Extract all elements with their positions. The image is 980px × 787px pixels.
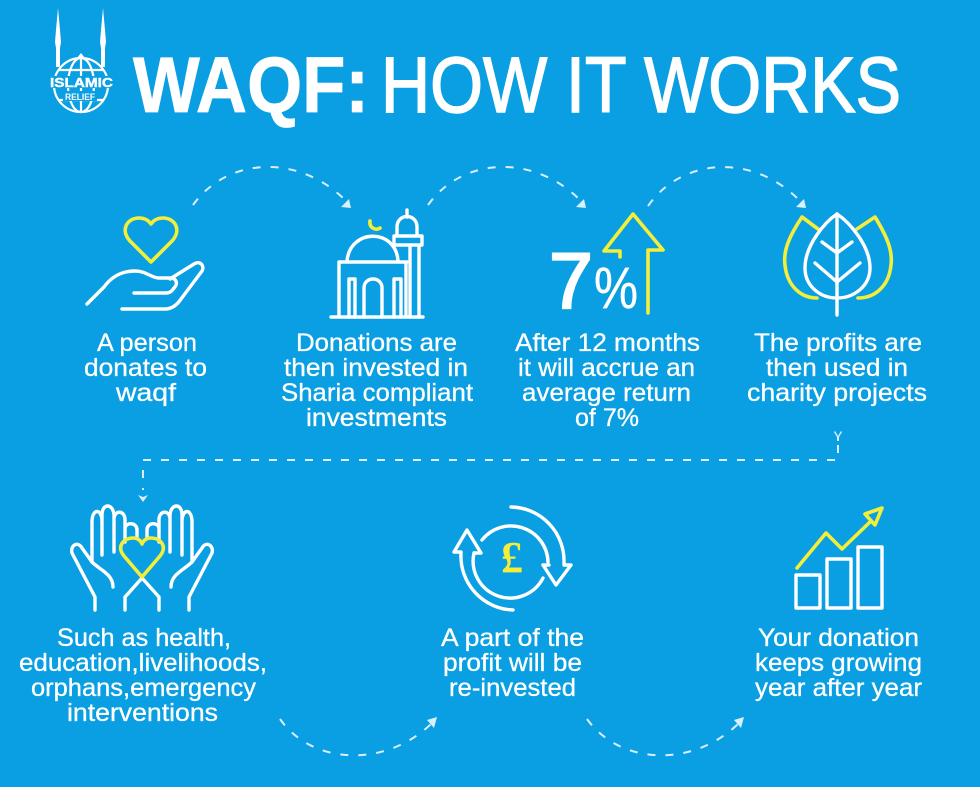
arrow: step 2 to step 3 xyxy=(428,167,586,208)
text: step 1: donates to xyxy=(84,354,207,382)
text: step 3 xyxy=(515,329,700,432)
text: step 1: waqf xyxy=(115,379,176,407)
text: step 4: then used in xyxy=(766,354,908,382)
title: HOW IT WORKS xyxy=(381,40,901,129)
text: keeps growing: Your donation xyxy=(758,624,919,652)
icon: pound with circular arrows xyxy=(454,507,571,610)
icon: hand holding heart xyxy=(87,218,203,309)
text: health and education: interventions xyxy=(67,699,218,727)
text: step 1 xyxy=(84,329,207,407)
text: re-invested: A part of the xyxy=(441,624,584,652)
arrow: step 3 to step 4 xyxy=(648,167,806,208)
text: step 3: After 12 months xyxy=(515,329,700,357)
icon: leaves xyxy=(785,214,891,315)
icon: seven percent with up arrow: 7 xyxy=(549,236,593,325)
arrow: step 1 to step 2 xyxy=(193,167,351,208)
icon: growth bar chart xyxy=(796,508,882,608)
text: re-invested: re-invested xyxy=(449,674,576,702)
text: health and education: education,livelihoods, xyxy=(19,649,267,677)
text: step 4 xyxy=(747,329,927,407)
title xyxy=(133,40,901,129)
arrow: bottom curve to growth xyxy=(587,717,744,755)
text: step 3: of 7% xyxy=(575,404,639,432)
text: step 4: charity projects xyxy=(747,379,927,407)
text: health and education: orphans,emergency xyxy=(31,674,256,702)
logo: Islamic Relief: RELIEF xyxy=(65,92,95,102)
logo: Islamic Relief xyxy=(50,8,114,112)
text: step 2: Donations are xyxy=(296,329,457,357)
text: step 2: investments xyxy=(306,404,447,432)
text: step 2: Sharia compliant xyxy=(281,379,473,407)
arrow: bottom curve to re-invest xyxy=(280,717,437,755)
text: health and education: Such as health, xyxy=(57,624,231,652)
arrow: connector to second row xyxy=(138,431,842,502)
icon: mosque xyxy=(331,210,423,317)
text: keeps growing: year after year xyxy=(755,674,922,702)
text: step 3: it will accrue an xyxy=(518,354,695,382)
icon: seven percent with up arrow xyxy=(549,214,663,325)
text: step 2: then invested in xyxy=(284,354,468,382)
icon: open hands with heart xyxy=(72,506,212,610)
text: step 3: average return xyxy=(522,379,691,407)
icon: pound with circular arrows: £ xyxy=(501,533,523,582)
text: step 1: A person xyxy=(97,329,197,357)
icon: seven percent with up arrow: % xyxy=(594,256,638,321)
text: keeps growing xyxy=(755,624,922,702)
title: WAQF: xyxy=(133,40,369,129)
logo: Islamic Relief: ISLAMIC xyxy=(50,75,114,90)
text: step 4: The profits are xyxy=(754,329,922,357)
text: step 2 xyxy=(281,329,473,432)
text: keeps growing: keeps growing xyxy=(755,649,922,677)
text: re-invested: profit will be xyxy=(443,649,582,677)
text: health and education xyxy=(19,624,267,727)
text: re-invested xyxy=(441,624,584,702)
